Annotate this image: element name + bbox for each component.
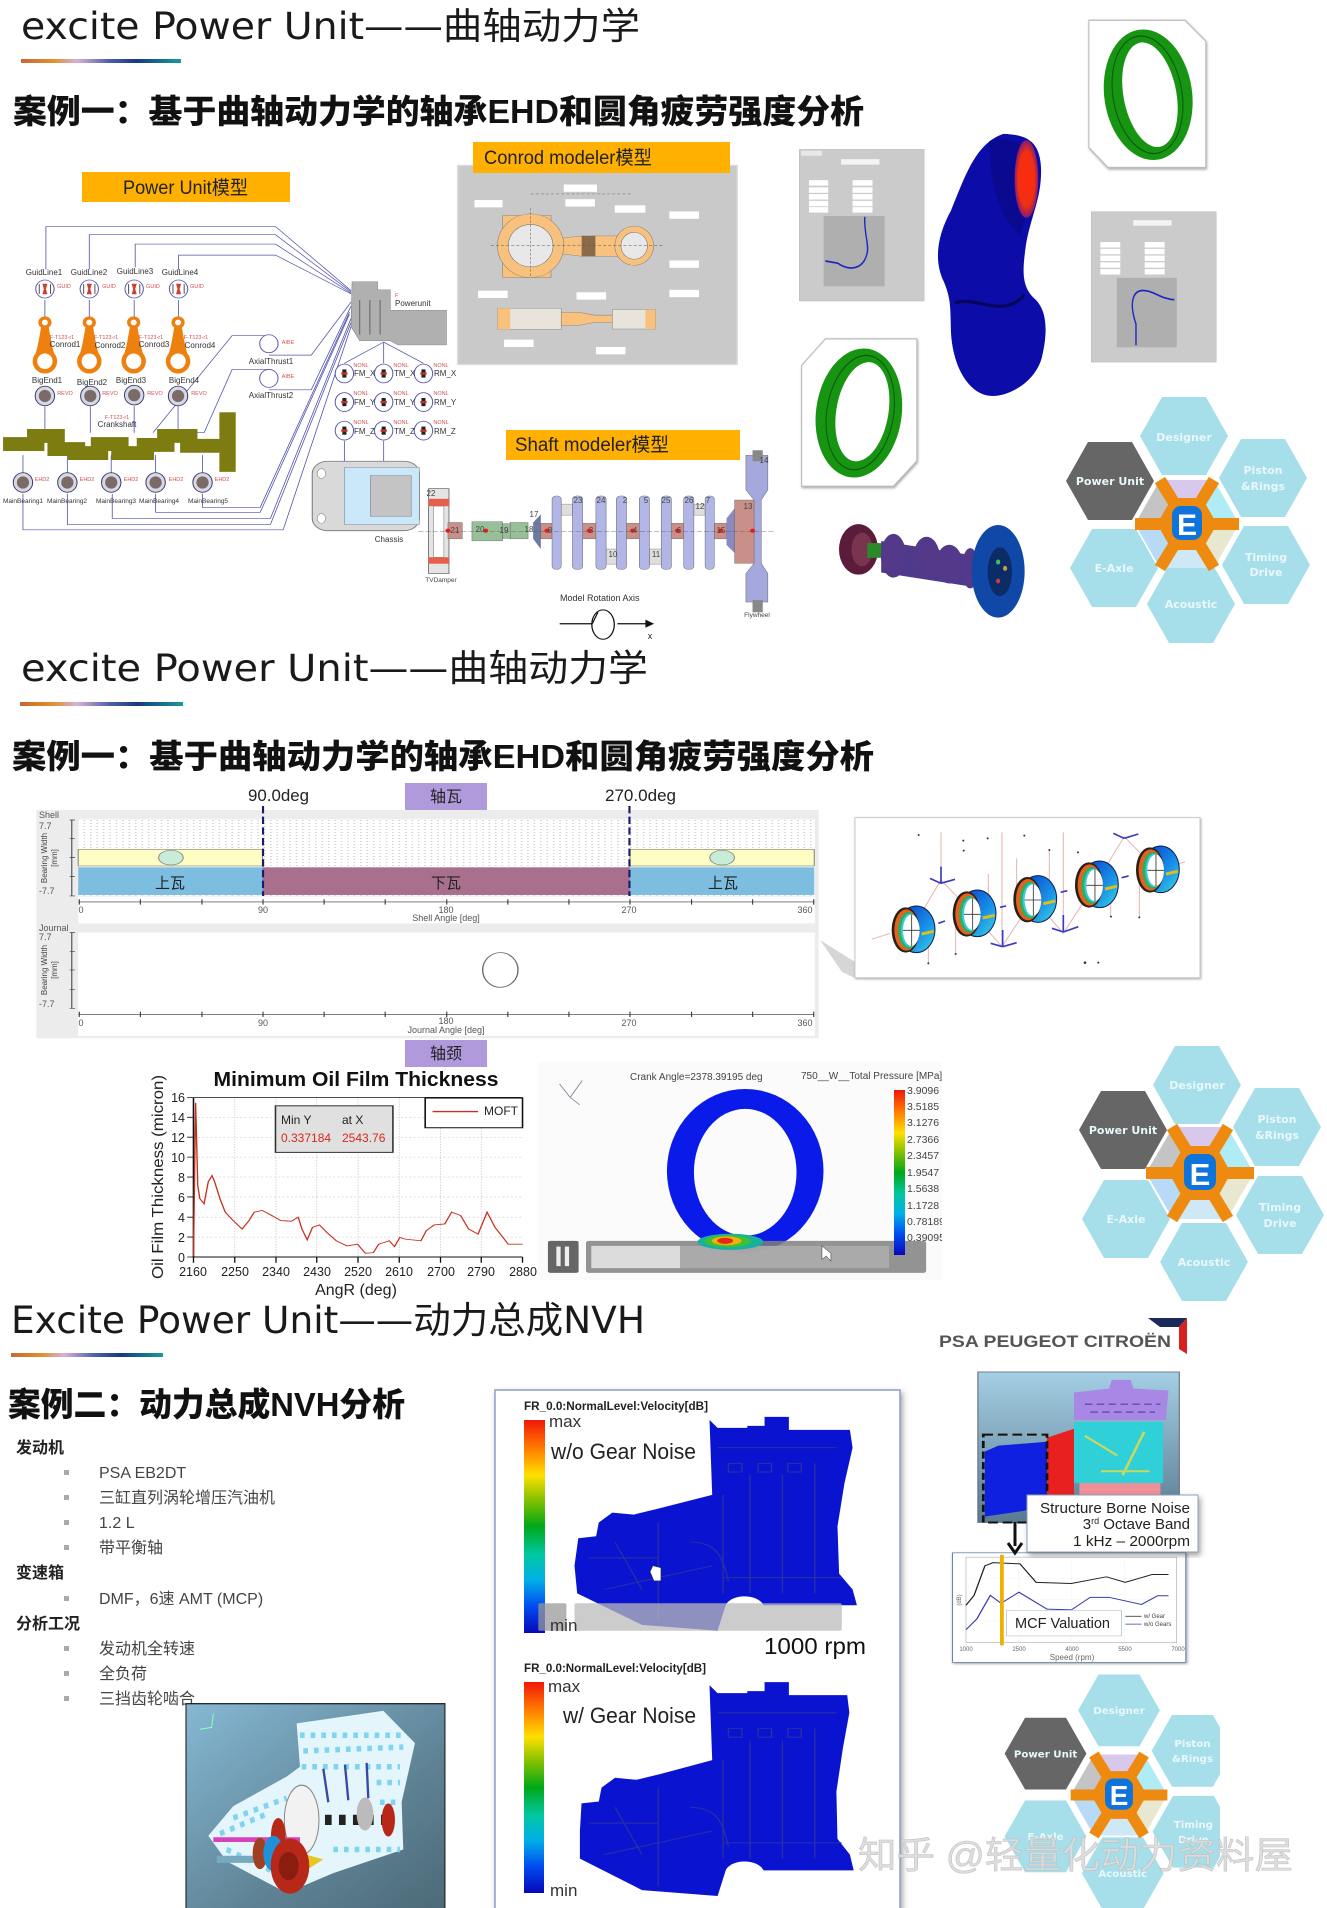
section 1 title: excite Power Unit——曲轴动力学 (21, 5, 640, 48)
diagram: Power Unit schematic: AIBE (282, 340, 295, 346)
logo: hexagon wheel 1: Designer (1156, 431, 1212, 444)
logo: hexagon wheel 2: Power Unit (1089, 1124, 1157, 1137)
logo: hexagon wheel 1 (1066, 397, 1310, 643)
diagram: Power Unit schematic: AIBE (282, 374, 295, 380)
panel: velocity level contour maps: FR_0.0:NormalLevel:Velocity[dB] (524, 1401, 708, 1413)
diagram: Shaft modeler crankshaft: 5 (644, 496, 649, 505)
diagram: Power Unit schematic: FM_Y (354, 398, 376, 407)
diagram: Power Unit schematic: Conrod2 (95, 341, 126, 350)
chart: minimum oil film thickness: 0 (178, 1251, 185, 1265)
chart: bearing total pressure ring: 0.39095 (907, 1232, 945, 1244)
text block: case specifications (16, 1438, 275, 1708)
chart: minimum oil film thickness: 4 (178, 1211, 185, 1225)
chart: shell and journal maps: Journal (39, 923, 69, 933)
chart: shell and journal maps: 0 (78, 905, 84, 915)
diagram: Shaft modeler crankshaft: Flywheel (744, 612, 770, 619)
chart: bearing total pressure ring: 750__W__Total Pressure [MPa] (801, 1071, 942, 1082)
diagram: Power Unit schematic: TM_Z (394, 427, 415, 436)
diagram: Shaft modeler crankshaft: Model Rotation Axis (560, 593, 640, 603)
chart: shell and journal maps: -7.7 (39, 999, 55, 1009)
diagram: Shaft modeler crankshaft: 8 (548, 526, 553, 535)
chart: MCF valuation speed sweep: 1000 (959, 1647, 973, 1653)
chart: minimum oil film thickness: AngR (deg) (315, 1282, 397, 1299)
logo: hexagon wheel 3: Drive (1178, 1835, 1209, 1846)
diagram: Shaft modeler crankshaft: 12 (696, 502, 705, 511)
logo: hexagon wheel 2: Acoustic (1178, 1256, 1230, 1269)
chart: shell and journal maps: 90 (258, 1018, 268, 1028)
diagram: Power Unit schematic: EHD2 (80, 477, 94, 483)
logo: hexagon wheel 2: &Rings (1255, 1129, 1299, 1142)
chart: bearing total pressure ring: 2.7366 (907, 1134, 939, 1146)
chart: minimum oil film thickness: 2520 (344, 1265, 372, 1279)
panel: velocity level contour maps: w/o Gear Noise (550, 1439, 696, 1464)
chart: minimum oil film thickness: Oil Film Thickness (micron) (150, 1075, 167, 1279)
diagram: Power Unit schematic: EHD2 (124, 477, 138, 483)
chart: bearing total pressure ring: 3.5185 (907, 1101, 939, 1113)
diagram: Power Unit schematic: NONL (393, 391, 409, 397)
diagram: Shaft modeler crankshaft: 25 (662, 496, 671, 505)
chart: minimum oil film thickness: 0.337184 (281, 1131, 331, 1145)
chart: shell and journal maps: 180 (438, 905, 454, 915)
diagram: Shaft modeler crankshaft: 21 (451, 526, 460, 535)
diagram: Power Unit schematic: Powerunit (395, 299, 431, 308)
chart: shell and journal maps: Shell Angle [deg] (412, 913, 480, 923)
section 1 title rule (21, 59, 181, 63)
chart: minimum oil film thickness: 16 (171, 1091, 185, 1105)
text block: case specifications: 全负荷 (99, 1665, 147, 1683)
label: bearing shell: 轴瓦 (430, 788, 462, 806)
chart: bearing total pressure ring: 2.3457 (907, 1150, 939, 1162)
3D: crankshaft model (839, 524, 1025, 618)
diagram: Power Unit schematic: REVO (102, 391, 119, 397)
chart: shell and journal maps: 270 (621, 1018, 637, 1028)
logo: PSA Peugeot Citroen (939, 1318, 1187, 1354)
3D: powertrain transparent model (186, 1704, 445, 1908)
text block: case specifications: 1.2 L (99, 1515, 135, 1532)
logo: hexagon wheel 2: Timing (1259, 1201, 1301, 1214)
diagram: Shaft modeler crankshaft (418, 450, 776, 641)
chart: shell and journal maps: 上瓦 (708, 875, 738, 892)
chart: shell and journal maps (36, 806, 819, 1038)
diagram: Power Unit schematic: GUID (190, 284, 204, 290)
chart: shell and journal maps: 下瓦 (431, 875, 461, 892)
logo: hexagon wheel 3 (1005, 1674, 1234, 1908)
diagram: Shaft modeler crankshaft: 18 (525, 525, 534, 534)
chart: bearing total pressure ring (548, 1072, 942, 1273)
diagram: Power Unit schematic: NONL (433, 391, 449, 397)
logo: hexagon wheel 2: E-Axle (1107, 1213, 1145, 1226)
diagram: Power Unit schematic: MainBearing4 (139, 498, 179, 505)
diagram: Power Unit schematic: Conrod4 (185, 341, 216, 350)
chart: minimum oil film thickness: 2340 (262, 1265, 290, 1279)
chart: minimum oil film thickness: 2880 (509, 1265, 537, 1279)
diagram: Power Unit schematic: RM_X (434, 369, 457, 378)
logo: hexagon wheel 3: E (1110, 1780, 1128, 1811)
diagram: Shaft modeler crankshaft: 6 (677, 526, 682, 535)
logo: hexagon wheel 1: &Rings (1241, 480, 1285, 493)
chart: MCF valuation speed sweep: 2500 (1012, 1647, 1026, 1653)
diagram: Shaft modeler crankshaft: 23 (574, 496, 583, 505)
chart: shell and journal maps: -7.7 (39, 886, 55, 896)
diagram: Shaft modeler crankshaft: x (648, 631, 653, 641)
chart: MCF valuation speed sweep: w/o Gears (1143, 1622, 1171, 1628)
diagram: Shaft modeler crankshaft: 22 (427, 489, 436, 498)
chart: minimum oil film thickness (150, 1069, 537, 1299)
callout: structure borne noise: rd (1091, 1516, 1099, 1526)
diagram: Power Unit schematic: F-T123-r1 (94, 335, 118, 341)
chart: shell and journal maps: 90 (258, 905, 268, 915)
panel: velocity level contour maps: w/ Gear Noise (562, 1703, 696, 1728)
logo: hexagon wheel 2: E (1190, 1157, 1210, 1192)
chart: bearing total pressure ring: 0.78189 (907, 1216, 945, 1228)
diagram: Power Unit schematic: F-T123-r1 (139, 335, 163, 341)
logo: hexagon wheel 2: Piston (1257, 1113, 1297, 1126)
diagram: Power Unit schematic: Conrod1 (50, 340, 81, 349)
logo: hexagon wheel 3: Piston (1174, 1739, 1211, 1750)
chart: MCF valuation speed sweep (952, 1553, 1186, 1662)
chart: MCF valuation speed sweep: MCF Valuation (1015, 1615, 1110, 1632)
chart: minimum oil film thickness: 8 (178, 1171, 185, 1185)
label: Power Unit model (82, 172, 290, 202)
panel: velocity level contour maps: max (549, 1412, 582, 1431)
3D: blue stress contour on fillet (938, 134, 1046, 396)
screenshot: journal side fillet dialog (799, 149, 924, 301)
logo: PSA Peugeot Citroen: PSA PEUGEOT CITROËN (939, 1332, 1171, 1351)
section 2 title rule (20, 702, 183, 706)
diagram: Power Unit schematic: Crankshaft (98, 420, 137, 429)
chart: minimum oil film thickness: 2700 (427, 1265, 455, 1279)
label: Conrod modeler: Conrod modeler模型 (484, 147, 652, 169)
diagram: Power Unit schematic: RM_Z (434, 427, 456, 436)
panel: velocity level contour maps (495, 1390, 900, 1908)
text block: case specifications: 发动机全转速 (99, 1640, 195, 1658)
logo: hexagon wheel 1: Power Unit (1076, 475, 1144, 488)
chart: shell and journal maps: [mm] (50, 849, 59, 867)
chart: bearing total pressure ring: Crank Angle=2378.39195 deg (630, 1072, 763, 1083)
text block: case specifications: 发动机 (16, 1438, 64, 1457)
diagram: Power Unit schematic: REVO (191, 391, 208, 397)
callout: structure borne noise: 1 kHz – 2000rpm (1073, 1533, 1190, 1550)
diagram: Shaft modeler crankshaft: 13 (744, 502, 753, 511)
chart: MCF valuation speed sweep: 5500 (1118, 1647, 1132, 1653)
diagram: Power Unit schematic: BigEnd1 (32, 376, 63, 385)
annotation: 270 deg: 270.0deg (605, 786, 676, 805)
diagram: Power Unit schematic: TM_Y (394, 398, 416, 407)
section 2 heading: 案例一：基于曲轴动力学的轴承EHD和圆角疲劳强度分析 (12, 738, 874, 775)
diagram: Power Unit schematic: NONL (353, 420, 369, 426)
logo: hexagon wheel 3: Power Unit (1014, 1749, 1077, 1760)
chart: minimum oil film thickness: 2790 (467, 1265, 495, 1279)
diagram: Power Unit schematic: GuidLine2 (71, 268, 108, 277)
diagram: Power Unit schematic: BigEnd4 (169, 376, 200, 385)
diagram: Power Unit schematic: F-T123-r1 (50, 335, 74, 341)
callout: structure borne noise: 3 (1083, 1516, 1091, 1533)
diagram: Power Unit schematic: EHD2 (169, 477, 183, 483)
diagram: Power Unit schematic: NONL (433, 363, 449, 369)
diagram: Power Unit schematic: EHD2 (35, 477, 49, 483)
text block: case specifications: DMF，6速 AMT (MCP) (99, 1590, 263, 1608)
label: Shaft modeler: Shaft modeler模型 (515, 434, 669, 456)
panel: velocity level contour maps: max (548, 1677, 581, 1696)
chart: bearing total pressure ring: 1.9547 (907, 1167, 939, 1179)
diagram: Power Unit schematic: REVO (147, 391, 164, 397)
chart: minimum oil film thickness: 12 (171, 1131, 185, 1145)
diagram: Power Unit schematic: F-T123-r1 (105, 415, 129, 421)
chart: shell and journal maps: 270 (621, 905, 637, 915)
diagram: Power Unit schematic: GuidLine4 (162, 268, 199, 277)
3D: powertrain surface velocity model (978, 1372, 1179, 1522)
diagram: Shaft modeler crankshaft: 26 (685, 496, 694, 505)
diagram: Power Unit schematic: REVO (57, 391, 74, 397)
diagram: Power Unit schematic: NONL (393, 363, 409, 369)
chart: minimum oil film thickness: Minimum Oil Film Thickness (214, 1069, 498, 1091)
callout: structure borne noise (1027, 1495, 1198, 1552)
chart: minimum oil film thickness: 2160 (179, 1265, 207, 1279)
logo: hexagon wheel 3: E-Axle (1027, 1832, 1064, 1843)
logo: hexagon wheel 1: E-Axle (1095, 562, 1133, 575)
diagram: Power Unit schematic: NONL (353, 391, 369, 397)
chart: bearing total pressure ring: 3.9096 (907, 1085, 939, 1097)
screenshot: pin side fillet dialog (1091, 212, 1216, 362)
3D: green bearing shell top (1089, 17, 1206, 172)
text block: case specifications: 变速箱 (16, 1563, 64, 1582)
chart: minimum oil film thickness: Min Y (281, 1113, 311, 1127)
chart: minimum oil film thickness: 14 (171, 1111, 185, 1125)
panel: velocity level contour maps: min (550, 1881, 577, 1900)
chart: bearing total pressure ring: 3.1276 (907, 1117, 939, 1129)
section 3 title rule (11, 1353, 163, 1357)
watermark: 知乎 @轻量化动力资料屋 (858, 1835, 1293, 1876)
diagram: Shaft modeler crankshaft: 24 (597, 496, 606, 505)
chart: minimum oil film thickness: 10 (171, 1151, 185, 1165)
chart: shell and journal maps: 360 (797, 1018, 813, 1028)
diagram: Shaft modeler crankshaft: 11 (652, 550, 661, 559)
logo: hexagon wheel 3: Designer (1093, 1706, 1145, 1717)
label: Power Unit model: Power Unit模型 (123, 177, 248, 199)
diagram: Power Unit schematic: MainBearing1 (3, 498, 43, 505)
section 3 heading: 案例二：动力总成NVH分析 (8, 1386, 405, 1423)
chart: minimum oil film thickness: 2250 (221, 1265, 249, 1279)
chart: shell and journal maps: Shell (39, 810, 59, 820)
callout: structure borne noise: Octave Band (1099, 1516, 1190, 1533)
chart: shell and journal maps: 上瓦 (155, 875, 185, 892)
diagram: Power Unit schematic: AxialThrust1 (249, 357, 294, 366)
logo: hexagon wheel 1: Timing (1245, 551, 1287, 564)
diagram: Shaft modeler crankshaft: 17 (530, 510, 539, 519)
panel: velocity level contour maps: min (550, 1616, 577, 1635)
text block: case specifications: 三挡齿轮啮合 (99, 1690, 195, 1708)
diagram: Power Unit schematic: MainBearing2 (47, 498, 87, 505)
panel: Conrod modeler (458, 165, 737, 365)
diagram: Power Unit schematic: GuidLine1 (26, 268, 63, 277)
diagram: Power Unit schematic: RM_Y (434, 398, 457, 407)
chart: MCF valuation speed sweep: 7000 (1171, 1647, 1185, 1653)
diagram: Power Unit schematic: F-T123-r1 (184, 335, 208, 341)
section 2 title: excite Power Unit——曲轴动力学 (21, 647, 648, 690)
chart: shell and journal maps: 180 (438, 1016, 454, 1026)
logo: hexagon wheel 2 (1079, 1046, 1324, 1301)
diagram: Shaft modeler crankshaft: 3 (589, 526, 594, 535)
diagram: Power Unit schematic: TM_X (394, 369, 416, 378)
chart: minimum oil film thickness: 6 (178, 1191, 185, 1205)
chart: MCF valuation speed sweep: w/ Gear (1143, 1614, 1165, 1620)
label: bearing shell (405, 783, 487, 810)
panel: velocity level contour maps: FR_0.0:NormalLevel:Velocity[dB] (524, 1663, 706, 1675)
chart: minimum oil film thickness: 2610 (385, 1265, 413, 1279)
logo: hexagon wheel 3: Timing (1174, 1820, 1213, 1831)
section 1 heading: 案例一：基于曲轴动力学的轴承EHD和圆角疲劳强度分析 (13, 93, 864, 130)
logo: hexagon wheel 3: Acoustic (1098, 1869, 1147, 1880)
label: Conrod modeler (473, 142, 730, 173)
diagram: Shaft modeler crankshaft: 19 (500, 526, 509, 535)
chart: bearing total pressure ring: 1.5638 (907, 1183, 939, 1195)
chart: shell and journal maps: [mm] (50, 961, 59, 979)
3D: bearing pressure rings card (855, 818, 1200, 978)
chart: MCF valuation speed sweep: 4000 (1065, 1647, 1079, 1653)
diagram: Power Unit schematic (3, 227, 457, 544)
chart: MCF valuation speed sweep: Speed (rpm) (1050, 1653, 1095, 1662)
logo: hexagon wheel 1: Piston (1243, 464, 1283, 477)
logo: hexagon wheel 1: Acoustic (1165, 598, 1217, 611)
chart: minimum oil film thickness: MOFT (484, 1104, 519, 1118)
chart: shell and journal maps: 7.7 (39, 821, 52, 831)
logo: hexagon wheel 1: Drive (1250, 566, 1282, 579)
diagram: Power Unit schematic: Chassis (375, 535, 403, 544)
diagram: Power Unit schematic: GuidLine3 (117, 267, 154, 276)
diagram: Shaft modeler crankshaft: 14 (760, 456, 769, 465)
label: Shaft modeler (506, 430, 740, 460)
diagram: Shaft modeler crankshaft: 10 (609, 550, 618, 559)
chart: shell and journal maps: Bearing Width (40, 833, 49, 883)
chart: shell and journal maps: 0 (78, 1018, 84, 1028)
diagram: Power Unit schematic: NONL (393, 420, 409, 426)
3D: green bearing shell bottom (802, 337, 917, 489)
label: journal: 轴颈 (430, 1045, 462, 1063)
logo: hexagon wheel 2: Drive (1264, 1217, 1296, 1230)
text block: case specifications: 分析工况 (16, 1614, 80, 1633)
diagram: Shaft modeler crankshaft: 4 (633, 526, 638, 535)
chart: shell and journal maps: Bearing Width (40, 945, 49, 995)
chart: minimum oil film thickness: at X (342, 1113, 363, 1127)
diagram: Power Unit schematic: Conrod3 (139, 340, 170, 349)
diagram: Shaft modeler crankshaft: 2 (623, 496, 628, 505)
diagram: Shaft modeler crankshaft: TVDamper (425, 577, 458, 584)
chart: shell and journal maps: Journal Angle [deg] (407, 1025, 485, 1035)
diagram: Power Unit schematic: F (395, 293, 399, 299)
panel: velocity level contour maps: 1000 rpm (764, 1633, 866, 1659)
diagram: Shaft modeler crankshaft: 20 (476, 525, 485, 534)
chart: minimum oil film thickness: 2430 (303, 1265, 331, 1279)
diagram: Power Unit schematic: BigEnd3 (116, 376, 147, 385)
logo: hexagon wheel 3: &Rings (1172, 1754, 1213, 1765)
diagram: Power Unit schematic: BigEnd2 (77, 378, 108, 387)
chart: bearing total pressure ring: 1.1728 (907, 1200, 939, 1212)
diagram: Power Unit schematic: GUID (102, 284, 116, 290)
chart: minimum oil film thickness: 2 (178, 1231, 185, 1245)
logo: hexagon wheel 2: Designer (1169, 1079, 1225, 1092)
text block: case specifications: 三缸直列涡轮增压汽油机 (99, 1488, 275, 1507)
callout: structure borne noise: Structure Borne Noise (1040, 1500, 1190, 1517)
chart: shell and journal maps: 7.7 (39, 932, 52, 942)
diagram: Power Unit schematic: MainBearing3 (96, 498, 136, 505)
diagram: Shaft modeler crankshaft: 7 (706, 496, 711, 505)
diagram: Power Unit schematic: FM_Z (354, 427, 375, 436)
label: journal (405, 1040, 487, 1067)
annotation: 90 deg: 90.0deg (248, 786, 309, 805)
text block: case specifications: 带平衡轴 (99, 1539, 163, 1557)
diagram: Power Unit schematic: MainBearing5 (188, 498, 228, 505)
chart: minimum oil film thickness: 2543.76 (342, 1131, 386, 1145)
diagram: Power Unit schematic: EHD2 (215, 477, 229, 483)
diagram: Power Unit schematic: GUID (146, 284, 160, 290)
diagram: Power Unit schematic: NONL (353, 363, 369, 369)
logo: hexagon wheel 1: E (1177, 509, 1197, 542)
text block: case specifications: PSA EB2DT (99, 1465, 186, 1482)
diagram: Power Unit schematic: AxialThrust2 (249, 391, 294, 400)
connector shadow to 3D card (820, 940, 855, 978)
chart: shell and journal maps: 360 (797, 905, 813, 915)
diagram: Power Unit schematic: FM_X (354, 369, 376, 378)
diagram: Power Unit schematic: GUID (57, 284, 71, 290)
section 3 title: Excite Power Unit——动力总成NVH (11, 1299, 645, 1342)
arrow: noise band to chart (1008, 1522, 1022, 1553)
diagram: Power Unit schematic: NONL (433, 420, 449, 426)
chart: MCF valuation speed sweep: (dB) (957, 1594, 963, 1606)
diagram: Shaft modeler crankshaft: 15 (717, 526, 726, 535)
